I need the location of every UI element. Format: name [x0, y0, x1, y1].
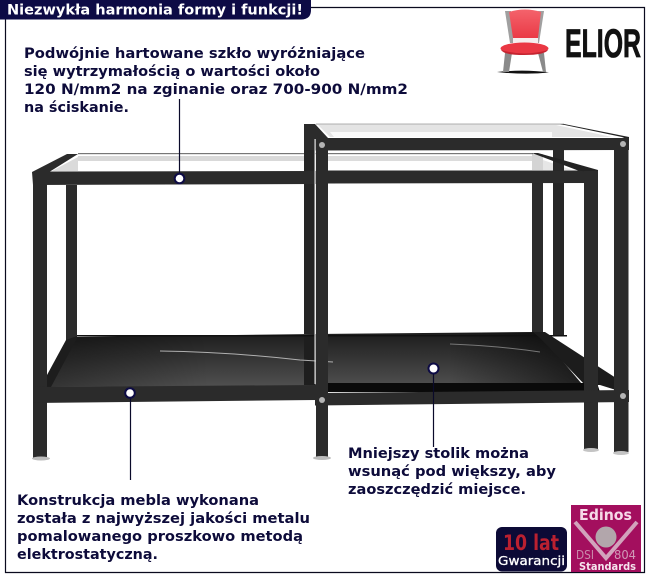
text block: metal construction	[17, 493, 310, 563]
text block: glass strength: Podwójnie hartowane szkło wyróżniające	[24, 46, 365, 62]
text block: glass strength: się wytrzymałością o wartości około	[24, 64, 320, 80]
shelf side rails	[328, 332, 616, 392]
badge: 10 years warranty	[496, 527, 567, 572]
text block: metal construction: elektrostatyczną.	[17, 547, 158, 563]
large table back legs and top rails	[304, 124, 629, 335]
large table top front rail	[315, 138, 629, 150]
text block: metal construction: Konstrukcja mebla wykonana	[17, 493, 259, 509]
text block: metal construction: została z najwyższej jakości metalu	[17, 511, 310, 527]
badge: 10 years warranty: 10 lat	[503, 531, 559, 555]
logo: Elior chair	[497, 10, 641, 74]
frame bolts	[319, 141, 626, 403]
badge: Edinos DSI 804 standards: Standards	[579, 560, 636, 573]
small table back legs	[66, 150, 564, 340]
badge: Edinos DSI 804 standards: 804	[614, 548, 636, 562]
text block: nesting: zaoszczędzić miejsce.	[348, 482, 526, 498]
text block: glass strength: na ściskanie.	[24, 100, 129, 116]
text block: glass strength: 120 N/mm2 na zginanie oraz 700-900 N/mm2	[24, 82, 408, 98]
product photo: nesting tables	[32, 124, 629, 460]
marble shelf	[47, 332, 581, 387]
callout line: glass	[175, 99, 184, 183]
header banner: Niezwykła harmonia formy i funkcji!	[7, 2, 303, 18]
badge: Edinos DSI 804 standards: Edinos	[579, 506, 632, 524]
badge: Edinos DSI 804 standards: DSI	[576, 548, 594, 562]
text block: nesting: Mniejszy stolik można	[348, 446, 529, 462]
callout line: metal frame	[125, 388, 135, 480]
small table glass	[52, 153, 572, 171]
large table lower rail and front legs	[313, 138, 629, 460]
text block: glass strength	[24, 46, 408, 116]
text block: nesting: wsunąć pod większy, aby	[348, 464, 556, 480]
callout line: nesting	[428, 364, 438, 447]
text block: metal construction: pomalowanego proszkowo metodą	[17, 529, 303, 545]
icon: chair	[497, 10, 549, 74]
large table glass	[316, 124, 612, 137]
badge: Edinos DSI 804 standards	[571, 505, 641, 573]
badge: 10 years warranty: Gwarancji	[498, 554, 565, 568]
small table front legs and lower rail	[32, 171, 599, 460]
small table top frame	[32, 153, 598, 185]
text block: nesting	[348, 446, 556, 498]
